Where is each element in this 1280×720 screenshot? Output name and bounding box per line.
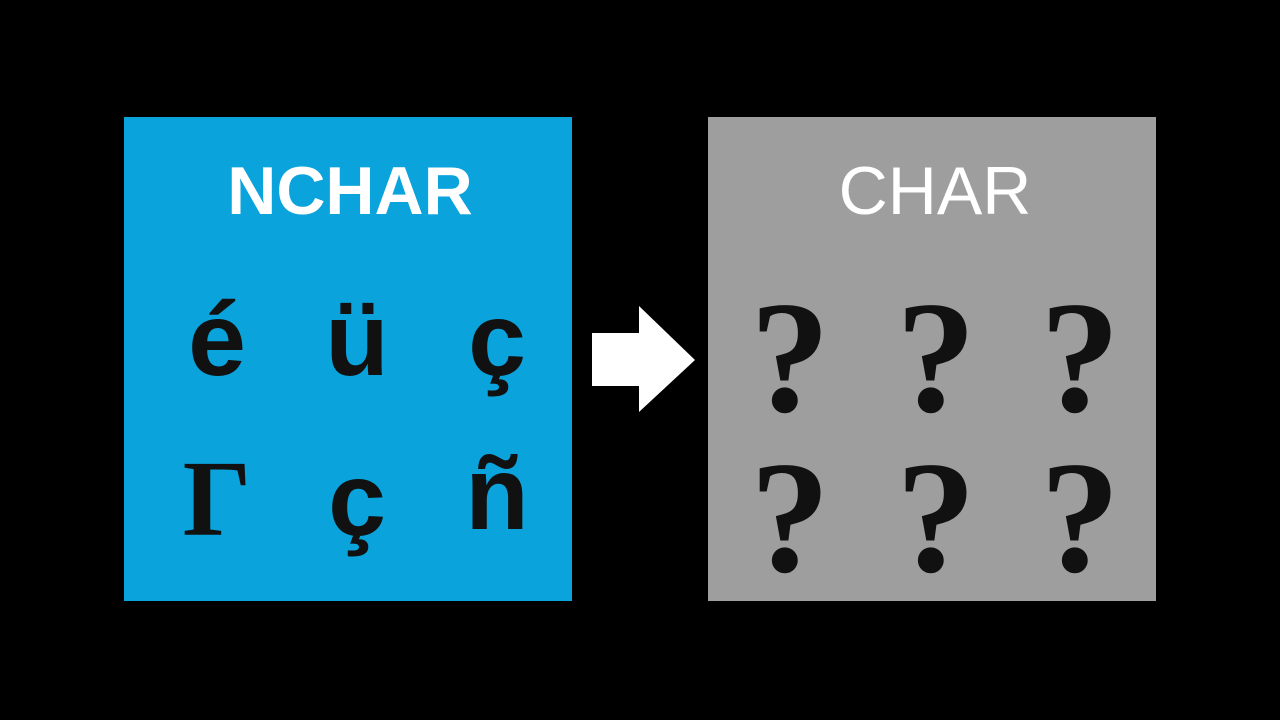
heading: CHAR: CHAR bbox=[839, 153, 1031, 229]
text block: unicode characters: ç bbox=[328, 442, 386, 558]
text block: unicode characters: é bbox=[188, 282, 246, 398]
text block: question marks: ? bbox=[896, 268, 976, 446]
text block: question marks: ? bbox=[1040, 268, 1120, 446]
text block: question marks: ? bbox=[750, 268, 830, 446]
heading: NCHAR: NCHAR bbox=[227, 153, 473, 229]
panel: NCHAR bbox=[124, 117, 572, 601]
text block: question marks: ? bbox=[750, 428, 830, 606]
text block: question marks bbox=[750, 268, 1120, 606]
arrow bbox=[592, 306, 695, 412]
text block: question marks: ? bbox=[1040, 428, 1120, 606]
text block: unicode characters: Γ bbox=[183, 440, 251, 559]
panel: CHAR bbox=[708, 117, 1156, 606]
text block: unicode characters: ü bbox=[325, 282, 389, 398]
text block: unicode characters bbox=[183, 282, 529, 559]
text block: unicode characters: ñ bbox=[465, 436, 529, 552]
text block: unicode characters: ç bbox=[468, 282, 526, 398]
text block: question marks: ? bbox=[896, 428, 976, 606]
